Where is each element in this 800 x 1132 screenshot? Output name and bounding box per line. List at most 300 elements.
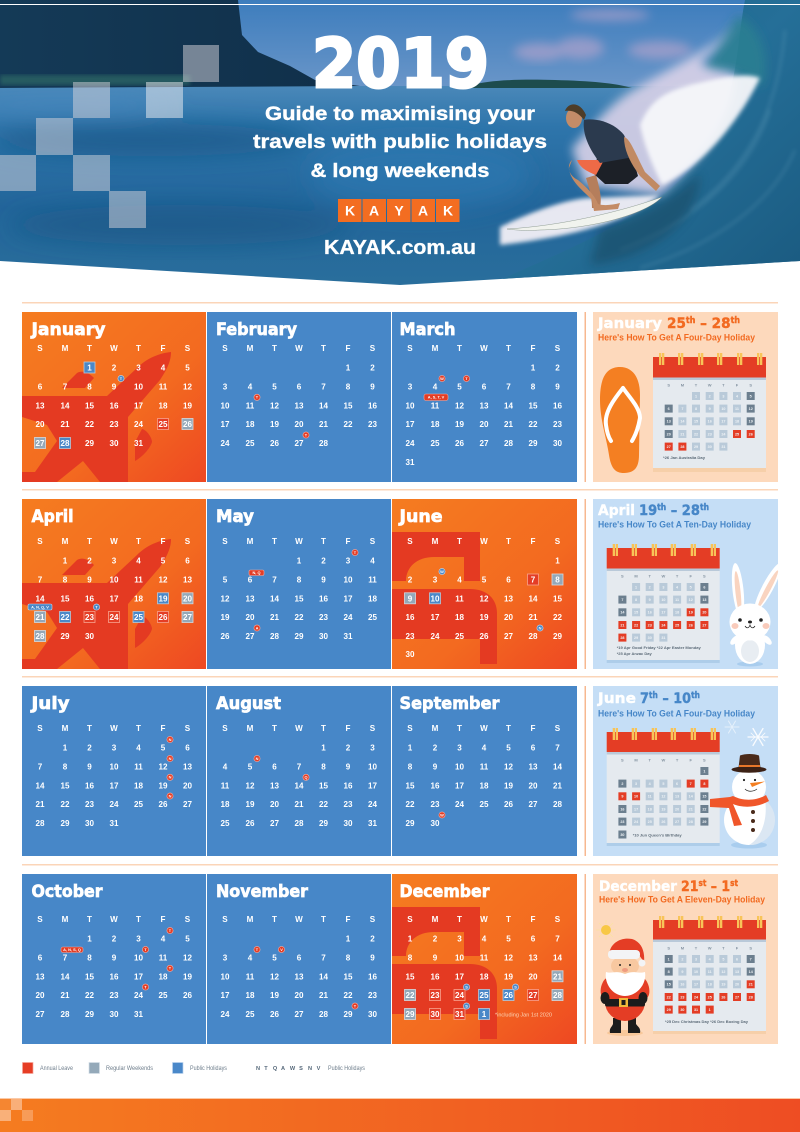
day grid: 2 bbox=[87, 556, 92, 566]
day grid: 1 bbox=[87, 364, 92, 372]
mini calendar: 31 bbox=[694, 1008, 698, 1012]
day grid: 21 bbox=[319, 991, 328, 1000]
panel: October bbox=[22, 874, 206, 1044]
day grid: 10 bbox=[134, 954, 143, 962]
day grid: 15 bbox=[85, 401, 94, 410]
panel: December long weekend bbox=[593, 874, 778, 1044]
day grid: T bbox=[321, 724, 326, 733]
day grid: 13 bbox=[35, 972, 45, 981]
day grid: 4 bbox=[248, 954, 253, 962]
mini calendar: 26 bbox=[689, 623, 693, 627]
day grid: 7 bbox=[555, 744, 560, 752]
day grid: 11 bbox=[159, 954, 168, 962]
day grid: 18 bbox=[158, 972, 168, 981]
day grid: 12 bbox=[504, 954, 513, 962]
day grid: 8 bbox=[63, 762, 68, 772]
mini calendar: 22 bbox=[694, 432, 698, 436]
day grid: 18 bbox=[134, 594, 143, 603]
day grid: 29 bbox=[405, 819, 415, 828]
day grid: 8 bbox=[87, 954, 92, 962]
day grid: 9 bbox=[555, 382, 560, 392]
day grid: 21 bbox=[553, 781, 562, 790]
mini calendar: 17 bbox=[721, 420, 725, 424]
mini calendar: T bbox=[722, 945, 725, 950]
website: KAYAK.com.au bbox=[324, 237, 476, 259]
holiday badges bbox=[249, 549, 358, 631]
day grid: 3 bbox=[370, 744, 375, 752]
day grid: 17 bbox=[368, 781, 377, 790]
day grid: S bbox=[222, 537, 228, 546]
holiday badges: W bbox=[440, 569, 444, 574]
mini calendar: 19 bbox=[689, 611, 693, 615]
day grid: 29 bbox=[528, 439, 538, 448]
holiday badges: T bbox=[305, 432, 308, 437]
day grid: 10 bbox=[343, 576, 353, 584]
wave tube shadow bbox=[703, 15, 766, 88]
mini calendar: 29 bbox=[702, 820, 706, 824]
mini calendar: 4 bbox=[736, 394, 739, 398]
day grid: W bbox=[295, 915, 303, 924]
day grid: 7 bbox=[531, 576, 536, 584]
day grid bbox=[220, 915, 377, 1019]
mini calendar: 24 bbox=[634, 820, 639, 824]
day grid: 20 bbox=[528, 972, 538, 981]
day grid: 13 bbox=[528, 954, 538, 962]
panel: December bbox=[392, 874, 577, 1044]
holiday badges bbox=[463, 984, 519, 1009]
holiday badges bbox=[254, 946, 358, 1009]
day grid: 19 bbox=[504, 781, 513, 790]
day grid: 21 bbox=[60, 420, 70, 429]
body bbox=[605, 983, 645, 1021]
day grid: 22 bbox=[528, 420, 538, 429]
day grid: 22 bbox=[343, 420, 353, 429]
mini calendar: 30 bbox=[680, 1008, 684, 1012]
day grid: T bbox=[506, 915, 511, 924]
day grid: F bbox=[531, 915, 536, 924]
holiday badges: N bbox=[169, 775, 172, 780]
mini calendar: 25 bbox=[675, 623, 679, 627]
hero background: sea bbox=[0, 86, 800, 290]
day grid: T bbox=[87, 344, 92, 353]
mini calendar: 24 bbox=[661, 623, 666, 627]
day grid: 21 bbox=[553, 972, 562, 981]
day grid: 18 bbox=[479, 781, 489, 790]
mini calendar: 28 bbox=[680, 445, 684, 449]
day grid: 9 bbox=[112, 954, 117, 962]
wave streaks bbox=[645, 34, 794, 267]
day grid: 4 bbox=[161, 934, 166, 944]
day grid: 30 bbox=[430, 1010, 440, 1019]
day grid: 2 bbox=[112, 364, 117, 372]
day grid: 3 bbox=[223, 954, 228, 962]
day grid: 21 bbox=[270, 613, 279, 622]
day grid bbox=[220, 344, 377, 448]
day grid: 25 bbox=[368, 613, 377, 622]
mini calendar: 10 bbox=[661, 598, 665, 602]
day grid: 14 bbox=[270, 594, 279, 603]
day grid: 8 bbox=[63, 576, 68, 584]
holiday badges bbox=[28, 604, 100, 610]
heading: April: April bbox=[32, 507, 74, 527]
day grid: 7 bbox=[38, 762, 43, 772]
mini calendar: F bbox=[689, 573, 692, 578]
day grid: 25 bbox=[134, 613, 143, 622]
highlighted days bbox=[34, 362, 193, 448]
day grid: 31 bbox=[368, 819, 377, 828]
mini calendar: *19 Apr Good Friday *22 Apr Easter Monday bbox=[617, 646, 702, 650]
day grid: 24 bbox=[109, 613, 119, 622]
day grid: 6 bbox=[185, 556, 190, 566]
mini calendar: 20 bbox=[702, 611, 706, 615]
mini calendar: *26 Jan Australia Day bbox=[663, 456, 706, 460]
scarf bbox=[710, 795, 769, 826]
day grid: 12 bbox=[220, 594, 230, 603]
hero banner bbox=[0, 0, 800, 290]
footer bar bbox=[0, 1098, 800, 1132]
day grid: 25 bbox=[245, 439, 255, 448]
mini calendar: 10 bbox=[634, 795, 638, 799]
holiday badges: T bbox=[169, 928, 172, 933]
day grid: 14 bbox=[319, 972, 328, 981]
panel: June long weekend: th bbox=[649, 691, 658, 701]
island bbox=[470, 80, 632, 88]
day grid: 24 bbox=[220, 1010, 230, 1019]
day grid: 8 bbox=[346, 954, 351, 962]
mini calendar: 1 bbox=[668, 957, 670, 961]
mini calendar: T bbox=[648, 573, 651, 578]
panel: May bbox=[207, 499, 391, 669]
day grid: 15 bbox=[60, 594, 70, 603]
hat bbox=[609, 939, 644, 962]
mini calendar: 30 bbox=[708, 445, 712, 449]
day grid: 13 bbox=[183, 576, 192, 584]
mini calendar: 28 bbox=[620, 636, 624, 640]
day grid: 11 bbox=[480, 954, 489, 962]
day grid: 26 bbox=[479, 632, 489, 641]
mini calendar: F bbox=[736, 382, 739, 387]
day grid: 8 bbox=[408, 762, 413, 772]
day grid: 30 bbox=[368, 1010, 377, 1019]
day grid: S bbox=[555, 915, 561, 924]
KAYAK logo: K bbox=[345, 202, 355, 218]
heading: November: November bbox=[216, 882, 309, 902]
day grid: 6 bbox=[531, 744, 536, 752]
day grid: S bbox=[555, 344, 561, 353]
day grid: 19 bbox=[220, 613, 230, 622]
day grid: 7 bbox=[272, 576, 277, 584]
panel: April long weekend: – 28 bbox=[666, 502, 700, 519]
day grid: 27 bbox=[35, 1010, 45, 1019]
day grid: 18 bbox=[430, 420, 440, 429]
mini calendar: 12 bbox=[721, 970, 725, 974]
panel: June long weekend: 7 bbox=[640, 690, 650, 707]
day grid: M bbox=[247, 537, 254, 546]
day grid: 20 bbox=[183, 781, 192, 790]
icon: snowflakes bbox=[725, 721, 768, 746]
mini calendar: 2 bbox=[709, 394, 711, 398]
day grid: 4 bbox=[223, 762, 228, 772]
day grid: 4 bbox=[370, 556, 375, 566]
mini calendar: 2 bbox=[621, 782, 623, 786]
day grid: S bbox=[555, 724, 561, 733]
holiday badges: A, S, T, V bbox=[428, 395, 445, 400]
day grid: 29 bbox=[85, 1010, 94, 1019]
legend: annual leave: Annual Leave bbox=[40, 1066, 74, 1072]
day grid: 31 bbox=[455, 1010, 464, 1019]
day grid: 28 bbox=[60, 1010, 70, 1019]
day grid: 5 bbox=[223, 576, 228, 584]
surfer bbox=[565, 104, 660, 211]
highlighted days bbox=[34, 593, 193, 642]
day grid: 11 bbox=[246, 972, 255, 981]
day grid: 17 bbox=[405, 420, 415, 429]
holiday badges: S bbox=[514, 984, 517, 989]
icon: snowman bbox=[710, 754, 775, 848]
day grid: M bbox=[62, 537, 69, 546]
day grid: T bbox=[272, 724, 277, 733]
holiday badges bbox=[167, 736, 173, 799]
mini calendar: 1 bbox=[709, 1008, 711, 1012]
day grid: 15 bbox=[405, 972, 415, 981]
mini calendar: 23 bbox=[648, 623, 652, 627]
day grid: 20 bbox=[294, 991, 304, 1000]
holiday badges: W bbox=[440, 812, 444, 817]
day grid bbox=[35, 537, 192, 641]
day grid: W bbox=[110, 344, 118, 353]
day grid: 5 bbox=[185, 364, 190, 372]
hero subtitle: & long weekends bbox=[310, 160, 490, 182]
day grid: 2 bbox=[321, 556, 326, 566]
day grid: 2 bbox=[433, 744, 438, 752]
day grid: 31 bbox=[343, 632, 353, 641]
day grid: 26 bbox=[158, 613, 168, 622]
mini calendar: 20 bbox=[735, 983, 739, 987]
day grid: 20 bbox=[245, 613, 255, 622]
panel: January long weekend: – 28 bbox=[695, 315, 731, 332]
mini calendar: 1 bbox=[635, 585, 637, 589]
holiday badges: N bbox=[169, 793, 172, 798]
day grid: T bbox=[136, 915, 141, 924]
day grid: S bbox=[370, 537, 376, 546]
day grid: 15 bbox=[405, 781, 415, 790]
mini calendar: 31 bbox=[661, 636, 665, 640]
day grid: 1 bbox=[555, 556, 560, 566]
mini calendar: 16 bbox=[708, 420, 712, 424]
day grid: 13 bbox=[294, 401, 304, 410]
day grid bbox=[405, 915, 562, 1019]
day grid: 30 bbox=[85, 632, 94, 641]
top white line bbox=[0, 4, 800, 5]
day grid: 7 bbox=[321, 954, 326, 962]
mini calendar: T bbox=[695, 382, 698, 387]
holiday badges: V bbox=[280, 947, 283, 952]
mini calendar: 4 bbox=[676, 585, 679, 589]
clouds bbox=[514, 9, 692, 61]
mini calendar: 25 bbox=[648, 820, 652, 824]
mini calendar: 9 bbox=[681, 970, 683, 974]
mini calendar: *10 Jun Queen's Birthday bbox=[633, 834, 683, 838]
day grid: 9 bbox=[370, 382, 375, 392]
day grid: M bbox=[432, 915, 439, 924]
panel: June long weekend: th bbox=[691, 691, 700, 701]
day grid: 15 bbox=[528, 401, 538, 410]
day grid: 9 bbox=[321, 576, 326, 584]
day grid: M bbox=[247, 915, 254, 924]
mini calendar: *25 Apr Anzac Day bbox=[617, 652, 653, 656]
day grid: 8 bbox=[555, 576, 560, 584]
legend: annual leave bbox=[22, 1062, 74, 1074]
torso bbox=[584, 119, 634, 163]
mini calendar: 3 bbox=[695, 957, 697, 961]
mini calendar: S bbox=[749, 382, 752, 387]
holiday badges bbox=[254, 394, 309, 438]
day grid: 17 bbox=[455, 972, 464, 981]
day grid: 2 bbox=[433, 934, 438, 944]
day grid: 7 bbox=[63, 954, 68, 962]
mini calendar: 6 bbox=[736, 957, 738, 961]
day grid: 12 bbox=[270, 972, 279, 981]
wave face bbox=[490, 0, 800, 285]
day grid: 30 bbox=[319, 632, 328, 641]
panel: April long weekend: th bbox=[657, 503, 666, 513]
face bbox=[611, 956, 639, 976]
pale squares bbox=[0, 45, 219, 228]
day grid: 18 bbox=[245, 991, 255, 1000]
mini calendar: 14 bbox=[680, 420, 685, 424]
day grid: T bbox=[272, 915, 277, 924]
icon: flip-flop bbox=[600, 367, 640, 473]
day grid: 27 bbox=[183, 800, 192, 809]
left shoreline bbox=[0, 75, 190, 85]
day grid: 14 bbox=[528, 594, 538, 603]
day grid: M bbox=[432, 344, 439, 353]
day grid: 15 bbox=[85, 972, 94, 981]
day grid: T bbox=[272, 537, 277, 546]
day grid: 5 bbox=[272, 954, 277, 962]
mini calendar: 8 bbox=[703, 782, 705, 786]
day grid: 3 bbox=[457, 934, 462, 944]
day grid bbox=[220, 537, 377, 641]
day grid: 7 bbox=[38, 576, 43, 584]
day grid: 22 bbox=[294, 613, 304, 622]
mini calendar: M bbox=[634, 757, 638, 762]
day grid: 17 bbox=[455, 781, 464, 790]
day grid: 30 bbox=[109, 1010, 119, 1019]
day grid: 23 bbox=[405, 632, 415, 641]
day grid: 5 bbox=[185, 934, 190, 944]
day grid bbox=[405, 537, 562, 659]
day grid: 28 bbox=[35, 632, 45, 641]
day grid: 1 bbox=[321, 744, 326, 752]
day grid: 16 bbox=[553, 401, 562, 410]
day grid: 10 bbox=[220, 401, 230, 410]
day grid: W bbox=[480, 537, 488, 546]
day grid: 28 bbox=[553, 991, 562, 1000]
day grid: 28 bbox=[528, 632, 538, 641]
day grid: 24 bbox=[343, 613, 353, 622]
mini calendar: 9 bbox=[649, 598, 651, 602]
holiday badges bbox=[439, 568, 543, 631]
mini calendar: 6 bbox=[668, 407, 670, 411]
day grid: 19 bbox=[158, 781, 168, 790]
day grid: 15 bbox=[553, 594, 562, 603]
mini calendar: S bbox=[667, 945, 670, 950]
day grid: 14 bbox=[35, 594, 45, 603]
day grid: 29 bbox=[60, 632, 70, 641]
day grid: 21 bbox=[60, 991, 70, 1000]
day grid: 29 bbox=[60, 819, 70, 828]
day grid: 18 bbox=[455, 613, 464, 622]
mini calendar: 27 bbox=[735, 995, 739, 999]
legend: public holidays: Public Holidays bbox=[190, 1066, 227, 1072]
heading: August: August bbox=[216, 694, 281, 714]
eyes and nose bbox=[619, 964, 621, 966]
day grid: 27 bbox=[528, 991, 538, 1000]
heading: October: October bbox=[32, 882, 103, 902]
day grid: 16 bbox=[368, 972, 377, 981]
heading: January bbox=[597, 315, 662, 332]
panel: December long weekend: st bbox=[730, 879, 738, 889]
day grid: 2 bbox=[370, 364, 375, 372]
day grid: 6 bbox=[38, 382, 43, 392]
mini calendar: 14 bbox=[689, 795, 694, 799]
holiday badges: S bbox=[465, 984, 468, 989]
holiday badges: N bbox=[169, 756, 172, 761]
foam lower bbox=[500, 195, 660, 245]
day grid bbox=[35, 724, 192, 828]
KAYAK logo: A bbox=[418, 202, 428, 218]
mini calendar: 5 bbox=[750, 394, 752, 398]
day grid: 6 bbox=[297, 382, 302, 392]
day grid: 10 bbox=[430, 594, 440, 603]
KAYAK logo: K bbox=[443, 202, 453, 218]
day grid: 12 bbox=[183, 954, 192, 962]
mini calendar: 18 bbox=[648, 807, 652, 811]
day grid: 12 bbox=[504, 762, 513, 772]
day grid: S bbox=[185, 537, 191, 546]
mini calendar: 15 bbox=[702, 795, 706, 799]
mini calendar: M bbox=[681, 382, 685, 387]
legend: public holidays bbox=[172, 1062, 227, 1074]
mini calendar: 19 bbox=[749, 420, 753, 424]
mini calendar: 20 bbox=[667, 432, 671, 436]
boots bbox=[610, 1018, 621, 1033]
day grid bbox=[35, 344, 192, 448]
day grid: 22 bbox=[319, 800, 328, 809]
day grid: 26 bbox=[220, 632, 230, 641]
day grid: 25 bbox=[430, 439, 440, 448]
day grid: W bbox=[110, 915, 118, 924]
day grid: 30 bbox=[553, 439, 562, 448]
holiday badges: N bbox=[169, 737, 172, 742]
day grid: 27 bbox=[183, 613, 192, 622]
mini calendar: 13 bbox=[735, 970, 739, 974]
day grid: 12 bbox=[479, 594, 489, 603]
legend: state codes: Public Holidays bbox=[328, 1066, 365, 1072]
orange shorts bbox=[577, 160, 604, 175]
day grid: 16 bbox=[109, 401, 119, 410]
day grid: W bbox=[480, 915, 488, 924]
day grid: 10 bbox=[109, 762, 119, 772]
day grid: 3 bbox=[433, 576, 438, 584]
day grid: 1 bbox=[63, 744, 68, 752]
day grid: 4 bbox=[136, 744, 141, 752]
day grid: 21 bbox=[294, 800, 304, 809]
panel: January long weekend bbox=[593, 312, 778, 482]
mini calendar: 29 bbox=[634, 636, 638, 640]
panel: August bbox=[207, 686, 391, 856]
